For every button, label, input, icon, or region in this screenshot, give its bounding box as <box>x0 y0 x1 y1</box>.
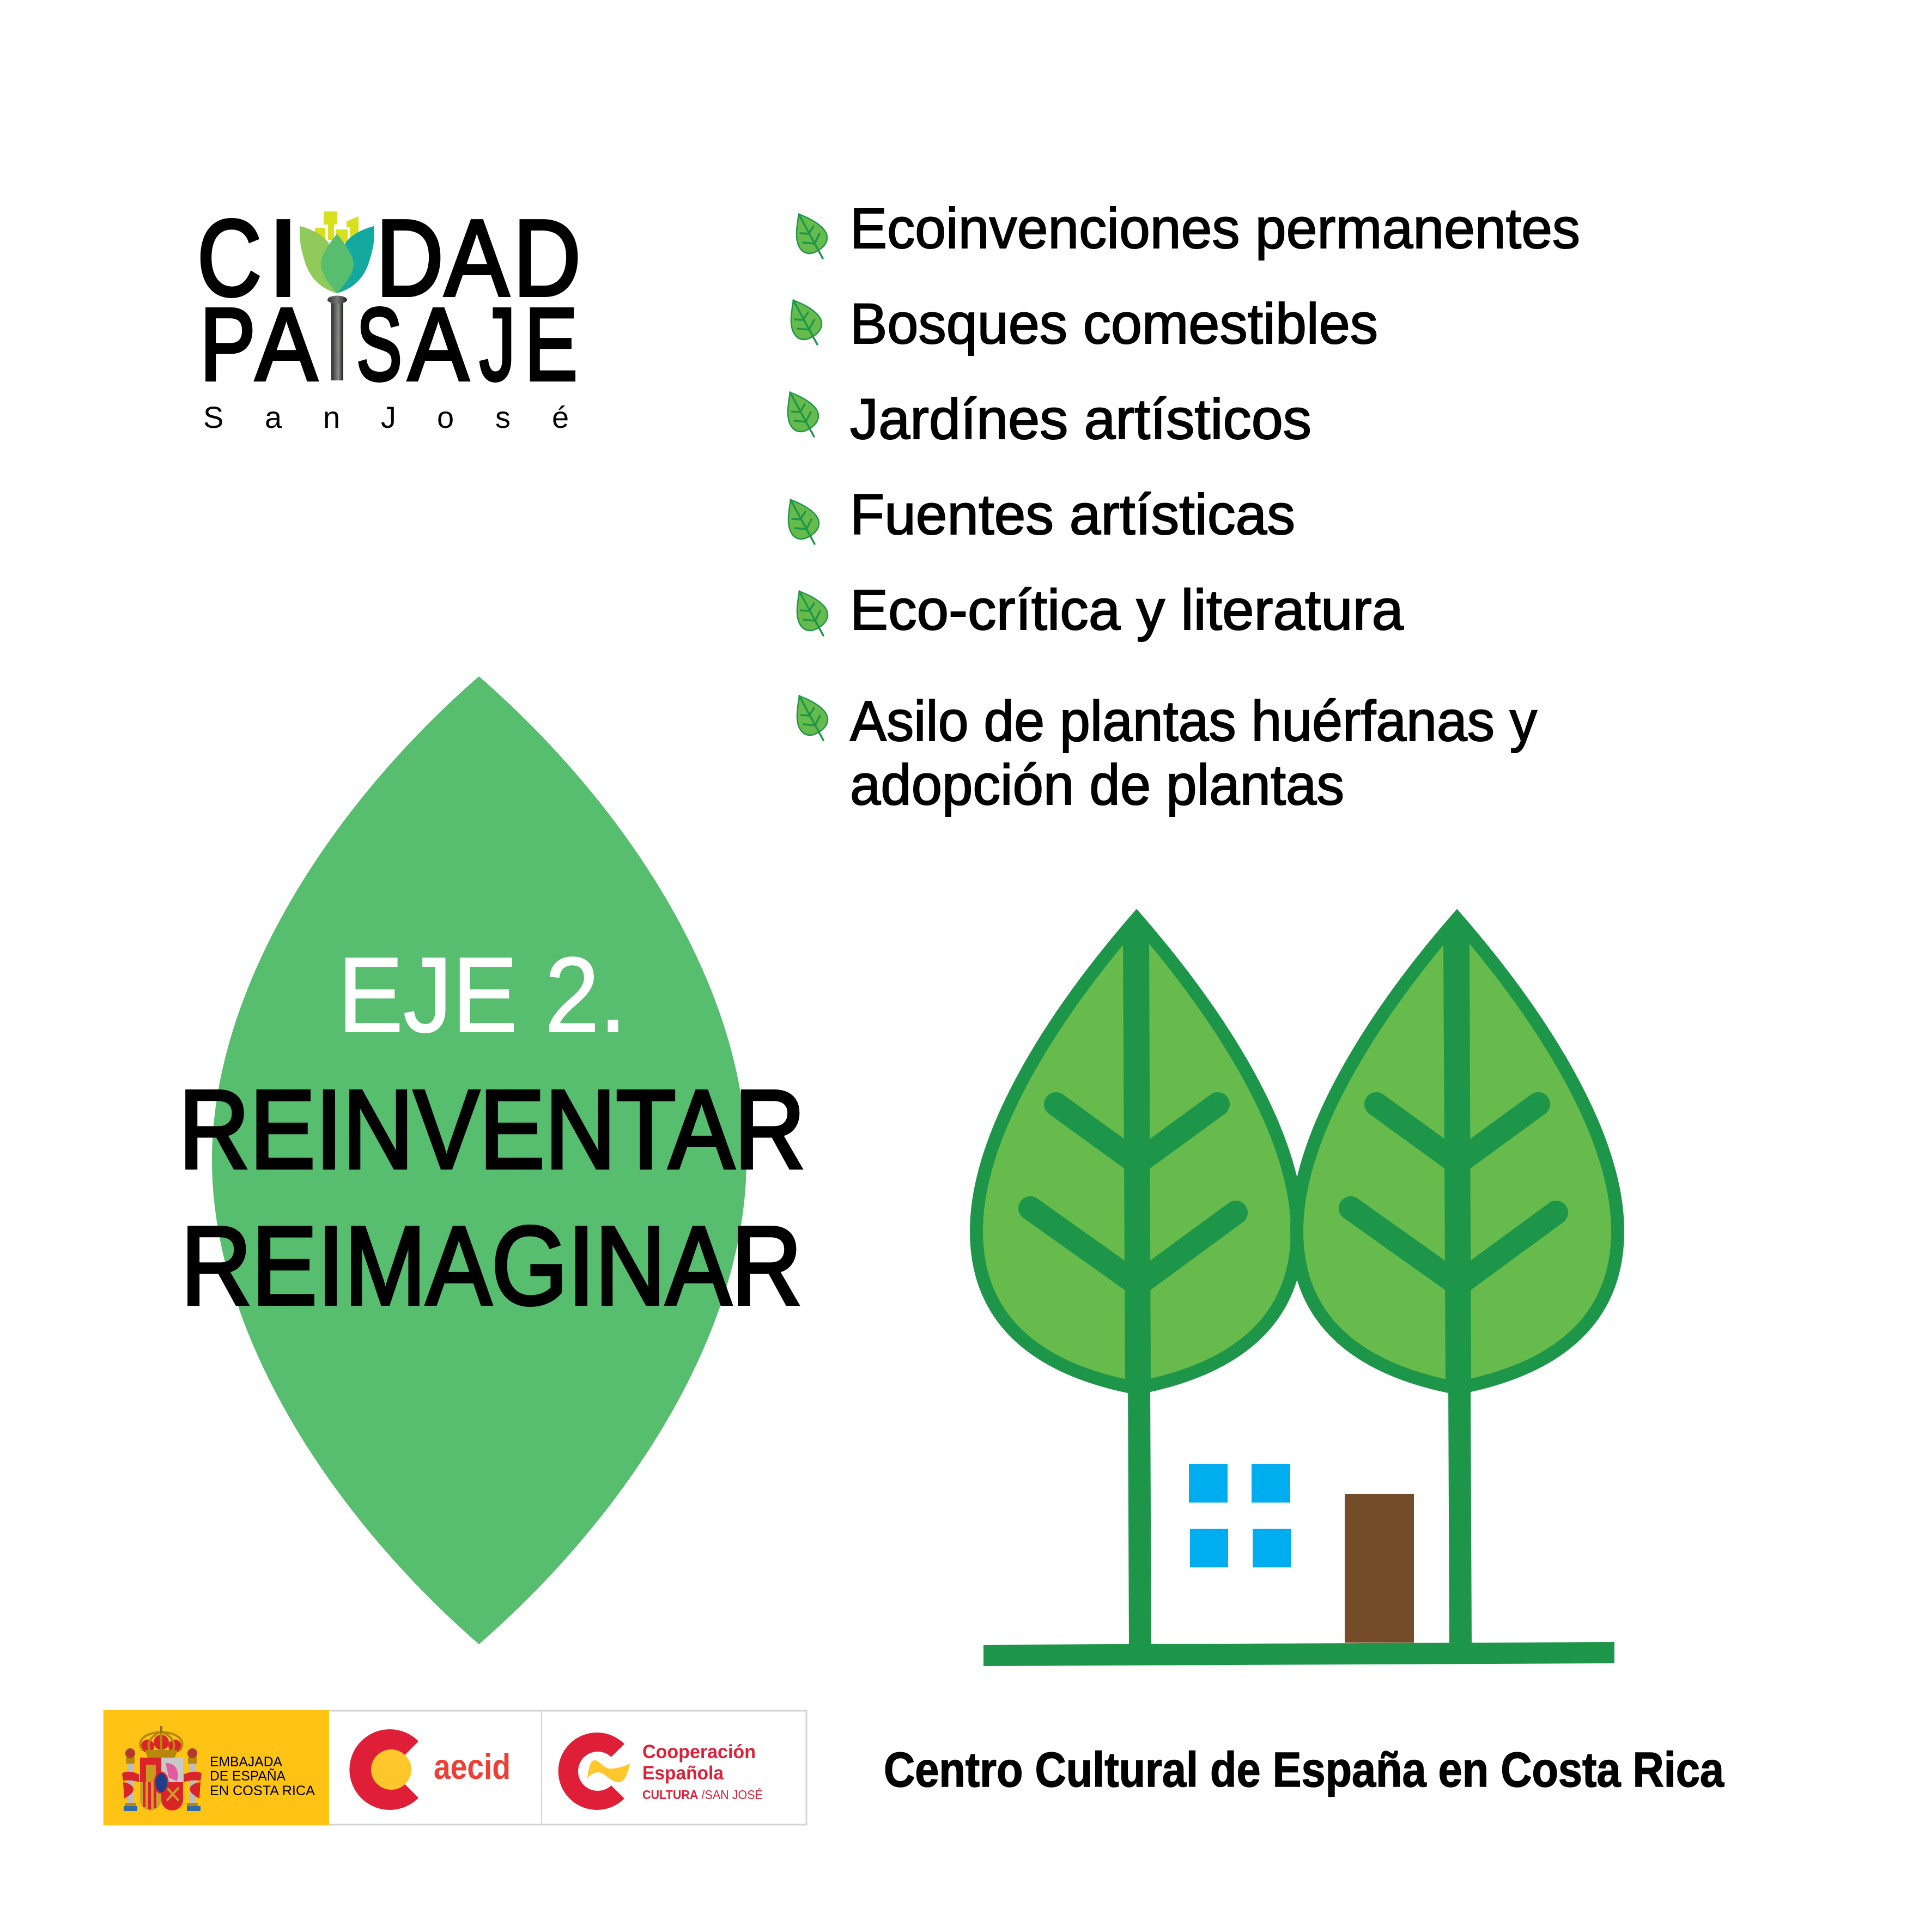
logo wordmark: PAISAJE: P <box>200 287 256 402</box>
right tree crown <box>1297 916 1618 1388</box>
heading: EJE 2.: EJE 2. <box>338 935 627 1055</box>
icon: leaf bullet 6 <box>797 696 828 740</box>
heading: REIMAGINAR: REIMAGINAR <box>181 1203 802 1328</box>
logo wordmark: PAISAJE <box>200 287 578 402</box>
logo wordmark: PAISAJE: S <box>356 287 402 402</box>
icon: leaf bullet 5 <box>797 591 828 635</box>
list item 3: Jardínes artísticos <box>850 387 1311 451</box>
list item 5: Eco-crítica y literatura <box>850 578 1404 642</box>
list item 4: Fuentes artísticas <box>850 483 1295 547</box>
logo: Ciudad Paisaje San José <box>197 198 581 434</box>
panel: Cooperación Española: Cooperación <box>642 1741 756 1763</box>
ground <box>983 1642 1614 1666</box>
big green leaf panel <box>212 676 746 1644</box>
logo wordmark: PAISAJE: E <box>525 287 578 402</box>
house door <box>1345 1494 1414 1643</box>
icon: coat of arms <box>122 1726 202 1811</box>
panel: Embajada de España <box>104 1710 329 1825</box>
tree trunks <box>1128 1384 1472 1646</box>
heading: REINVENTAR: REINVENTAR <box>179 1067 805 1192</box>
logo wordmark: PAISAJE: J <box>479 287 515 402</box>
logo wordmark: CIUDAD: I <box>268 198 299 319</box>
list bullets and items <box>788 197 1580 817</box>
left tree crown <box>976 916 1297 1388</box>
list item 6: Asilo de plantas huérfanas y <box>850 689 1537 753</box>
logo subtitle: San José: SanJosé <box>203 400 569 434</box>
text: Embajada de España en Costa Rica: DE ESPAÑA <box>210 1768 286 1784</box>
list item 2: Bosques comestibles <box>850 292 1378 356</box>
footer caption: Centro Cultural: Centro Cultural de España en Costa Rica <box>884 1743 1724 1797</box>
house windows <box>1189 1464 1291 1567</box>
icon: leaf bullet 3 <box>788 392 818 437</box>
text: Embajada de España en Costa Rica: EN COSTA RICA <box>210 1783 315 1798</box>
panel: Cooperación Española: CULTURA /SAN JOSÉ <box>642 1788 763 1802</box>
panel: Cooperación Española: Española <box>642 1763 724 1784</box>
logo wordmark: CIUDAD: D <box>376 198 444 319</box>
icon: leaf bullet 2 <box>791 300 822 344</box>
logo wordmark: CIUDAD: A <box>445 198 509 319</box>
text: Embajada de España en Costa Rica: EMBAJADA <box>210 1754 282 1770</box>
logo icon: pillar <box>327 295 347 380</box>
logo wordmark: CIUDAD <box>197 198 581 319</box>
logo icon: yellow city buildings <box>315 211 359 243</box>
panel: Cooperación Española <box>558 1733 763 1810</box>
list item 6, second line: adopción de plantas <box>850 753 1344 817</box>
text: Embajada de España en Costa Rica <box>210 1754 315 1798</box>
logo wordmark: CIUDAD: D <box>513 198 581 319</box>
icon: leaf bullet 1 <box>797 214 827 258</box>
list item 1: Ecoinvenciones permanentes <box>850 197 1580 261</box>
divider <box>541 1711 542 1824</box>
logo wordmark: PAISAJE: A <box>408 287 469 402</box>
illustration: two trees and house <box>976 916 1618 1666</box>
panel: AECID: aecid <box>434 1747 511 1786</box>
sponsor logo strip <box>104 1710 806 1825</box>
logo wordmark: PAISAJE: A <box>256 287 317 402</box>
logo icon: flower <box>300 226 374 293</box>
panel: AECID <box>349 1729 511 1810</box>
logo wordmark: CIUDAD: C <box>197 198 262 319</box>
strip frame <box>104 1711 806 1825</box>
icon: leaf bullet 4 <box>788 500 819 544</box>
